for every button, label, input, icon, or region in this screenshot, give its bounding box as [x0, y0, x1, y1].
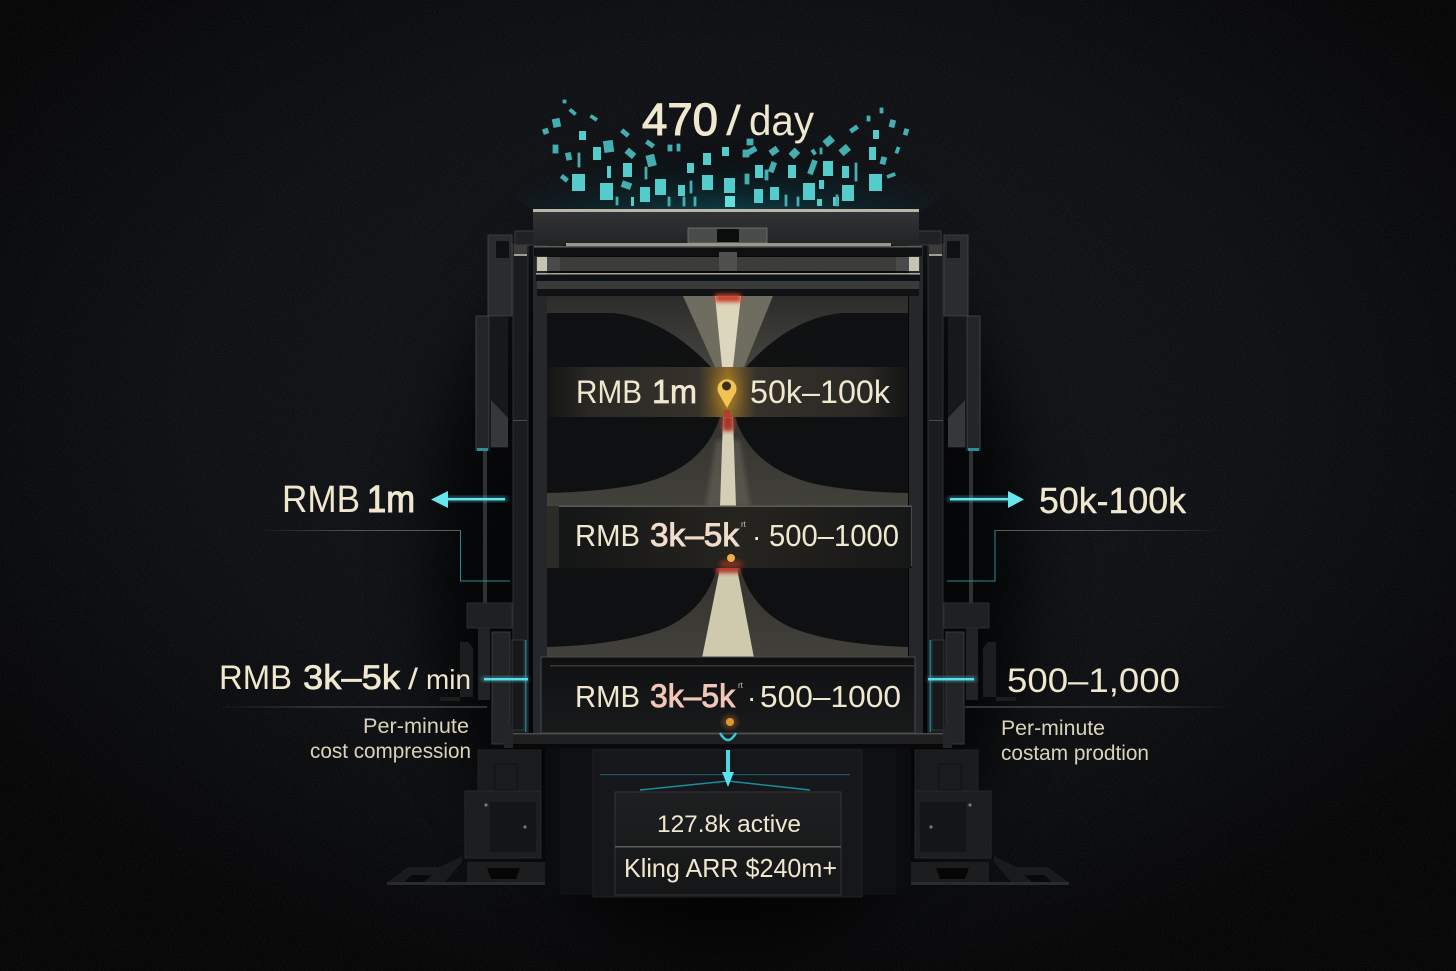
title: 470 / day: 470 — [642, 94, 718, 145]
funnel window: top section — [547, 294, 908, 368]
band 3: RMB 3k-5k and 500-1000: 3k–5k — [650, 678, 736, 714]
machine: left side structure — [387, 231, 562, 885]
band 3: RMB 3k-5k and 500-1000 — [541, 657, 915, 733]
band 3: RMB 3k-5k and 500-1000: 500–1000 — [760, 679, 901, 714]
callout: RMB 3k-5k per minute: RMB — [219, 659, 292, 697]
band 1: RMB 1m and 50k-100k: 1m — [652, 373, 697, 410]
callout: 50k-100k: 50k-100k — [1039, 480, 1187, 521]
machine: right side structure — [894, 231, 1069, 885]
callout: RMB 1m: RMB — [282, 479, 360, 521]
callout: RMB 1m: 1m — [367, 479, 415, 521]
callout: 500-1,000: 500–1,000 — [1007, 662, 1180, 700]
callout: 500-1,000 — [928, 662, 1235, 765]
callout: RMB 3k-5k per minute — [215, 659, 528, 763]
callout: RMB 3k-5k per minute: cost compression — [310, 740, 471, 763]
title: 470 / day: day — [749, 97, 814, 144]
band 2: RMB 3k-5k and 500-1000: RMB — [575, 518, 640, 553]
down arrow into display — [600, 733, 850, 790]
display: active users and ARR — [615, 792, 841, 895]
band 3: RMB 3k-5k and 500-1000: · — [747, 682, 756, 713]
title: 470 / day — [642, 94, 814, 145]
funnel window: lower section — [547, 565, 908, 658]
band 1: RMB 1m and 50k-100k: 50k–100k — [750, 374, 891, 410]
teal document particles — [503, 90, 953, 250]
title: 470 / day: / — [726, 97, 741, 144]
band 2: RMB 3k-5k and 500-1000: 500–1000 — [769, 518, 899, 553]
callout: RMB 3k-5k per minute: 3k–5k — [303, 659, 401, 697]
arrow: right cyan — [948, 491, 1024, 508]
callout: RMB 3k-5k per minute: min — [426, 664, 471, 695]
callout: RMB 3k-5k per minute: / — [408, 663, 419, 696]
band 2: RMB 3k-5k and 500-1000: · — [752, 521, 761, 552]
callout: RMB 3k-5k per minute: Per-minute — [363, 715, 469, 738]
arrow: left cyan — [431, 491, 507, 508]
callout: 500-1,000: Per-minute — [1001, 717, 1105, 740]
display: active users and ARR: Kling ARR $240m+ — [624, 853, 837, 883]
machine: base — [504, 726, 952, 897]
band 3: RMB 3k-5k and 500-1000: RMB — [575, 679, 640, 714]
band 1: RMB 1m and 50k-100k — [547, 367, 908, 417]
callout: RMB 1m — [258, 479, 510, 581]
callout: 50k-100k — [947, 480, 1225, 581]
callout: 500-1,000: costam prodtion — [1001, 742, 1149, 765]
icon: location pin — [713, 374, 741, 417]
funnel window: middle section — [547, 415, 908, 506]
band 1: RMB 1m and 50k-100k: RMB — [576, 374, 642, 410]
band 2: RMB 3k-5k and 500-1000: 3k–5k — [650, 517, 740, 553]
band 2: RMB 3k-5k and 500-1000 — [547, 506, 912, 568]
band 3: RMB 3k-5k and 500-1000: rt — [738, 681, 744, 690]
machine: top housing — [533, 209, 922, 296]
band 2: RMB 3k-5k and 500-1000: rt — [741, 520, 747, 529]
display: active users and ARR: 127.8k active — [657, 811, 801, 838]
